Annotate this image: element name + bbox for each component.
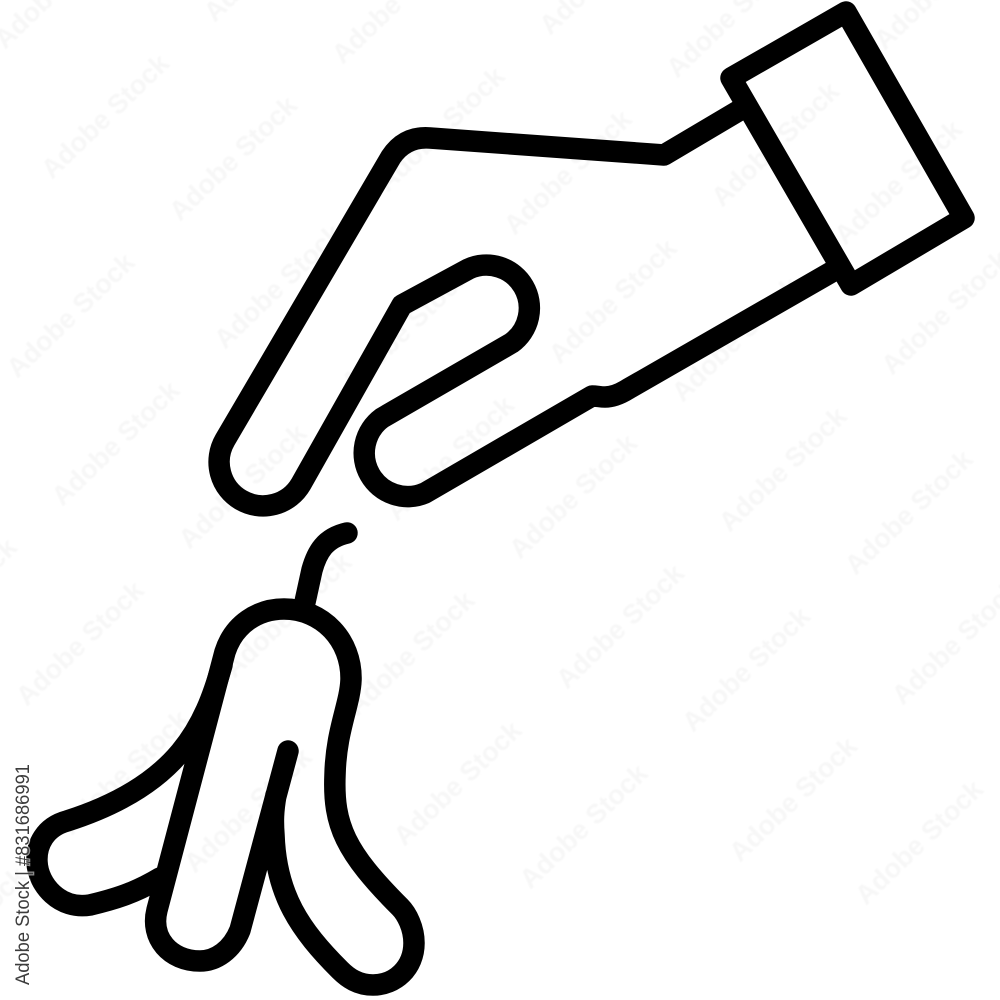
text: Adobe Stock [335, 260, 476, 397]
text: Adobe Stock [163, 89, 304, 226]
text: Adobe Stock [35, 47, 176, 184]
text: Adobe Stock [514, 757, 654, 894]
text: Adobe Stock [178, 741, 318, 878]
text: Adobe Stock [208, 217, 349, 354]
text: Adobe Stock [713, 400, 853, 537]
pepper body [156, 609, 414, 985]
text: Adobe Stock [666, 270, 806, 407]
text: Adobe Stock [503, 427, 644, 564]
stem [305, 533, 347, 602]
icon: hand [219, 12, 964, 506]
text: Adobe Stock [676, 600, 817, 737]
text: Adobe Stock [498, 103, 638, 240]
left pepper lobe [37, 665, 222, 906]
text: Adobe Stock [173, 417, 313, 554]
text: Adobe Stock [828, 113, 969, 250]
text: Adobe Stock [1, 246, 141, 383]
text: Adobe Stock [46, 374, 186, 511]
text: Adobe Stock [723, 730, 864, 867]
hand outline [219, 107, 835, 506]
icon: chili pepper [37, 533, 414, 985]
text: Adobe Stock [849, 773, 990, 910]
text: Adobe Stock [388, 714, 528, 851]
text: Adobe Stock [371, 60, 511, 197]
text: Adobe Stock [380, 389, 521, 526]
cuff [731, 12, 964, 285]
text: Adobe Stock [839, 443, 979, 580]
text: Adobe Stock [10, 574, 150, 711]
text: Adobe Stock [55, 703, 195, 840]
text: Adobe Stock [218, 546, 358, 683]
text: Adobe Stock [705, 75, 846, 212]
text: Adobe Stock [543, 232, 683, 369]
text: Adobe Stock [550, 557, 691, 694]
text: Adobe Stock [341, 584, 481, 721]
stock label: Adobe Stock | #831686991 [13, 764, 34, 985]
